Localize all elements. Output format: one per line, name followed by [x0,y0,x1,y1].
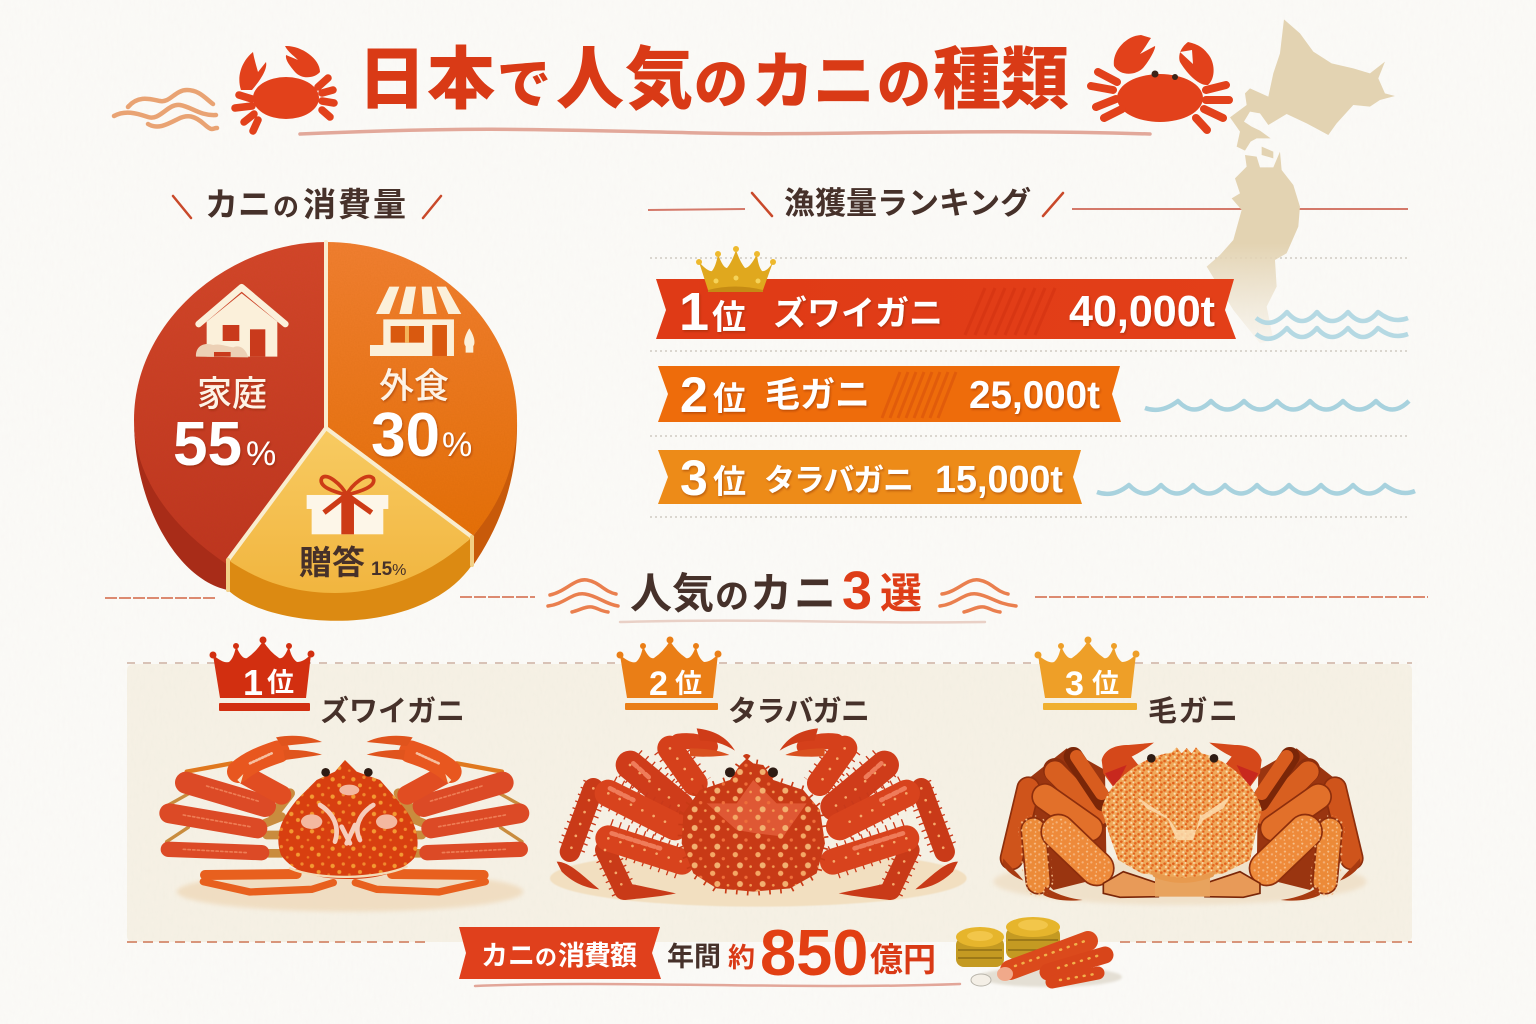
waves: row 2 [1145,401,1409,410]
rank bar 2 [658,366,1121,423]
slice: home 55% [134,242,326,565]
label: gift: 15% [371,559,406,580]
rank bar 3: 15,000t [935,459,1063,501]
illustration: hairy crab [993,743,1367,905]
section heading: consumption: 費 [338,186,371,223]
pie chart [134,242,517,621]
rank bar 3: タラバガニ [764,463,914,498]
annual spending ribbon: 費 [584,941,611,971]
section heading: popular crabs top 3 [105,561,1428,622]
section heading: popular crabs top 3: 選 [880,570,922,617]
rank bar 2: 位 [713,380,746,417]
main title: 類 [1001,42,1069,118]
section heading: consumption: 量 [373,186,406,223]
main title: 種 [933,42,1001,118]
label: home: 55 [173,410,242,479]
crown: rank 2: 2 [649,665,668,703]
pie side walls [134,420,517,621]
section heading: popular crabs top 3: 人 [630,570,672,617]
section heading: consumption: 消 [303,186,336,223]
section heading: consumption: カ [205,186,238,223]
icon: gift [307,477,388,534]
section heading: consumption: ニ [238,186,271,223]
section heading: catch ranking: 漁獲量ランキング [784,186,1031,221]
label: dining out: 外食 [379,367,449,406]
annual spending figure: 年間 [667,942,721,972]
title crab icon left [235,46,334,131]
panel: top 3 crabs [127,636,1412,942]
label: gift: 贈答 [299,544,365,581]
annual spending figure: 850 [760,916,868,989]
icon: house [196,287,285,357]
illustration: snow crab [167,736,523,912]
main title: カ [752,48,814,117]
main title: 日 [358,42,426,118]
crab legs [997,941,1105,982]
section heading: popular crabs top 3: 3 [842,561,872,621]
title crab icon right [1091,35,1229,130]
main title: 気 [625,42,693,118]
crown: rank 3 [1034,636,1140,710]
section heading: consumption [173,186,441,223]
label: hairy crab: 毛ガニ [1148,695,1238,728]
main title: 本 [427,42,495,118]
section heading: popular crabs top 3: カ [750,570,792,617]
label: dining out: 30 [371,401,440,470]
section heading: consumption: の [273,192,299,222]
wavy decoration left of title [114,90,217,129]
crown: rank 1: 1 [243,662,263,703]
rank bar 3: 3 [680,450,708,506]
crown: rank 2: 位 [675,669,702,699]
rank bar 2: 毛ガニ [765,376,870,415]
annual spending ribbon: の [535,945,557,970]
label: home [173,375,276,479]
coin stack right [1006,917,1060,959]
waves: row 1 [1256,312,1408,339]
crown: gold [696,246,776,292]
label: dining out [371,367,472,470]
section heading: popular crabs top 3: ニ [794,570,836,617]
icon: coins and crab legs [956,917,1122,987]
section heading: popular crabs top 3: の [715,578,749,616]
rank bar 1: 1 [679,282,709,342]
main title: 人 [556,42,624,118]
main title: の [877,55,931,115]
main title: の [694,55,748,115]
coin stack left [956,927,1004,967]
annual spending figure: 億円 [870,941,936,978]
japan map [1207,19,1395,343]
rank bar 1: 位 [712,299,746,337]
illustration: king crab [550,728,967,907]
wave icon left [548,580,618,612]
rank bar 2: 2 [680,367,708,423]
section heading: catch ranking [648,186,1408,221]
label: home: 家庭 [197,375,267,414]
crown: rank 1 [210,636,314,711]
crown: rank 1: 位 [267,668,294,698]
rank bar 3: 位 [713,463,746,500]
wave icon right [940,580,1016,612]
label: snow crab: ズワイガニ [320,694,465,728]
label: king crab: タラバガニ [728,695,870,728]
label: gift [299,544,406,581]
rank bar 1: ズワイガニ [773,294,943,333]
annual spending figure: 約 [728,943,755,973]
annual spending ribbon [459,927,661,979]
section heading: popular crabs top 3: 気 [672,570,714,617]
annual spending ribbon: ニ [508,941,535,971]
annual spending ribbon: 額 [610,941,637,971]
main title: ニ [813,48,875,117]
annual spending ribbon: 消 [558,941,585,971]
title underline brush stroke [300,129,1150,134]
crown: rank 2 [616,636,722,710]
rank bar 3 [658,450,1082,506]
rank bar 1 [656,279,1236,342]
rank bar 2: 25,000t [969,374,1100,417]
slice: dining out 30% [326,242,517,537]
annual spending ribbon: カ [481,941,508,971]
main title: で [497,55,551,115]
annual spending figure [475,916,960,989]
waves: row 3 [1097,485,1415,494]
crown: rank 3: 3 [1065,665,1084,703]
label: home: % [246,435,276,473]
slice: gift 15% [228,428,472,593]
rank bar 1: 40,000t [1069,287,1215,336]
label: dining out: % [442,426,472,464]
icon: shop [370,287,474,356]
crown: rank 3: 位 [1092,669,1119,699]
